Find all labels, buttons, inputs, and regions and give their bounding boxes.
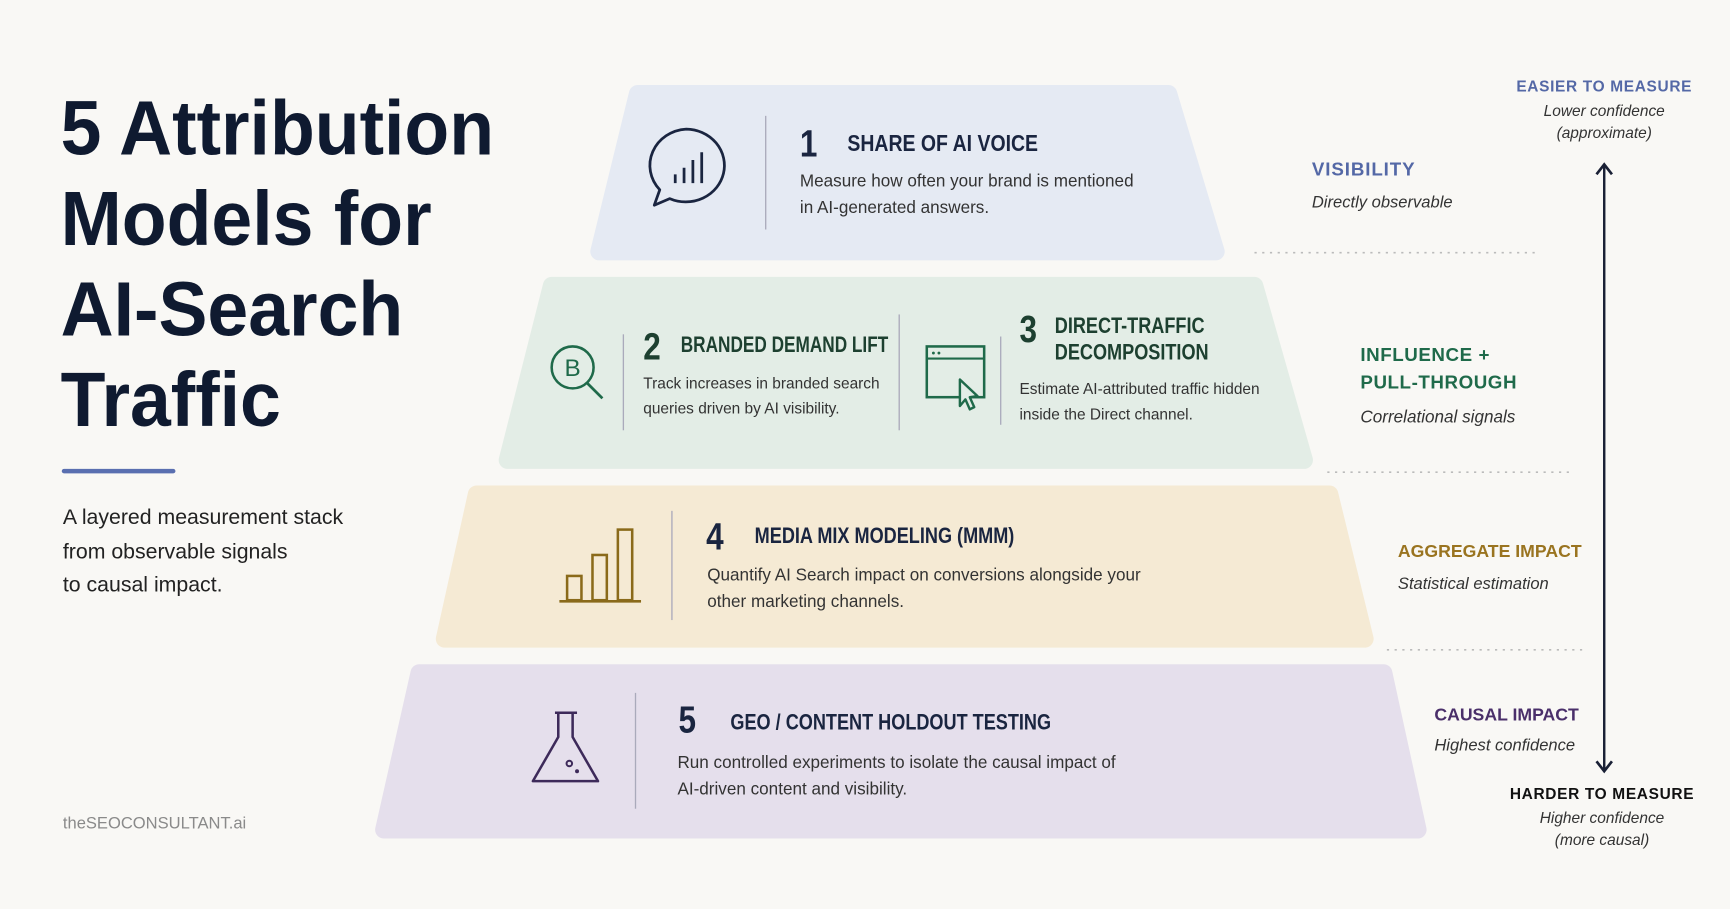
axis top label [1516, 77, 1692, 142]
tier 1 content: SHARE OF AI VOICE [847, 131, 1038, 157]
tier 2 content: direct traffic decomposition [926, 309, 1260, 423]
tier 4 content [532, 700, 1116, 799]
footer brand: theSEOCONSULTANT.ai [63, 814, 246, 833]
axis bottom label [1510, 784, 1694, 848]
tier 2 content: branded demand lift: BRANDED DEMAND LIFT [681, 333, 888, 357]
icon: speech bubble chart [648, 128, 726, 207]
icon: magnifier B: B [565, 355, 581, 382]
tier 4 content: 5 [679, 700, 696, 741]
right label: aggregate [1398, 543, 1582, 594]
arrow: measurement axis [1596, 162, 1613, 774]
tier 2 content: direct traffic decomposition: Estimate AI-attributed traffic hidden [1019, 380, 1260, 397]
axis bottom label: HARDER TO MEASURE [1510, 784, 1694, 802]
right label: visibility: VISIBILITY [1312, 159, 1416, 180]
icon: browser with cursor [926, 345, 986, 411]
right label: visibility [1312, 159, 1453, 212]
subtitle: to causal impact. [63, 574, 223, 597]
right label: aggregate: AGGREGATE IMPACT [1398, 543, 1582, 562]
tier 2 content: branded demand lift: 2 [643, 327, 661, 369]
heading: 1 [800, 124, 817, 165]
tier 3 content: Quantify AI Search impact on conversions alongside your [707, 566, 1141, 585]
tier 2 shape [508, 286, 1304, 460]
right label: aggregate: Statistical estimation [1398, 575, 1549, 594]
tier 4 content: GEO / CONTENT HOLDOUT TESTING [730, 711, 1051, 735]
tier 3 content: other marketing channels. [707, 592, 904, 611]
subtitle: from observable signals [63, 540, 288, 563]
axis top label: (approximate) [1557, 124, 1652, 141]
right label: visibility: Directly observable [1312, 193, 1453, 212]
axis bottom label: Higher confidence [1540, 809, 1664, 826]
description: Measure how often your brand is mentioned [800, 172, 1134, 191]
tier 2 content: branded demand lift: queries driven by AI visibility. [643, 399, 840, 417]
right label: influence: Correlational signals [1360, 408, 1515, 427]
description [800, 172, 1134, 217]
icon: flask [532, 712, 600, 782]
axis bottom label: (more causal) [1555, 831, 1649, 848]
tier 3 content: MEDIA MIX MODELING (MMM) [755, 524, 1014, 548]
right label: causal: Highest confidence [1434, 736, 1575, 755]
subtitle: A layered measurement stack [63, 506, 343, 530]
tier 1 content [648, 124, 1134, 217]
right label: influence: INFLUENCE + [1360, 344, 1490, 365]
title: Models for [61, 175, 432, 261]
title [61, 85, 494, 442]
tier 2 content: branded demand lift [550, 327, 888, 417]
title: 5 Attribution [61, 85, 494, 171]
right label: influence: PULL-THROUGH [1360, 372, 1517, 393]
tier 4 shape [384, 673, 1418, 830]
icon: bar chart [559, 528, 642, 603]
icon: magnifier B [550, 345, 604, 400]
right label: causal: CAUSAL IMPACT [1434, 706, 1579, 725]
tier 3 shape [445, 494, 1365, 639]
tier 2 content: direct traffic decomposition: DECOMPOSITION [1055, 341, 1209, 365]
tier 3 content: 4 [706, 516, 724, 558]
tier 4 content: Run controlled experiments to isolate the causal impact of [677, 754, 1116, 772]
right label: causal [1434, 706, 1579, 755]
description: in AI-generated answers. [800, 199, 989, 217]
title: Traffic [61, 356, 281, 442]
tier 2 content: direct traffic decomposition: 3 [1019, 309, 1037, 351]
tier 3 content [559, 516, 1141, 611]
axis top label: Lower confidence [1544, 102, 1665, 119]
axis top label: EASIER TO MEASURE [1516, 77, 1692, 95]
tier 4 content: AI-driven content and visibility. [677, 780, 907, 799]
subtitle [63, 506, 344, 597]
title: AI-Search [61, 266, 403, 352]
tier 2 content: branded demand lift: Track increases in branded search [643, 374, 880, 392]
tier 2 content: direct traffic decomposition: DIRECT-TRAFFIC [1055, 314, 1205, 339]
tier 2 content: direct traffic decomposition: inside the Direct channel. [1019, 405, 1193, 423]
right label: influence [1360, 344, 1517, 427]
tier 1 shape [599, 94, 1216, 252]
accent divider [62, 469, 175, 473]
